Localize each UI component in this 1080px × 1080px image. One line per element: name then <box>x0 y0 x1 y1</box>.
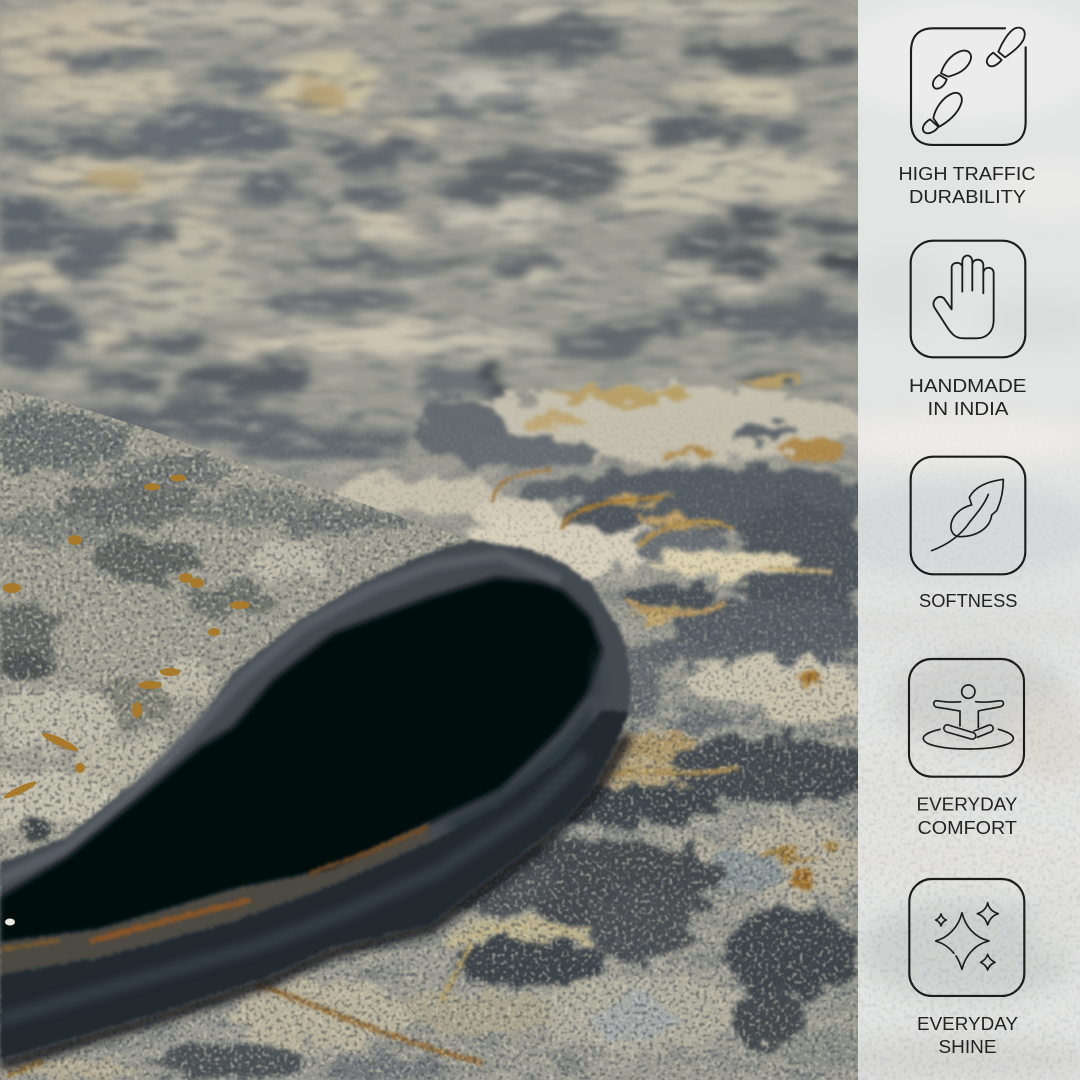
rug binding and outer edge <box>0 540 631 1060</box>
label: high traffic durability: HIGH TRAFFIC <box>898 163 1036 184</box>
label: everyday comfort: EVERYDAY <box>916 794 1018 814</box>
loose thread <box>5 918 15 926</box>
panel: translucent feature sidebar <box>858 0 1080 1080</box>
soft shadow under the roll <box>0 735 628 1065</box>
feature: handmade in india <box>909 241 1026 419</box>
feature: softness <box>911 457 1025 611</box>
dark hollow of the roll <box>0 577 602 943</box>
label: everyday shine <box>917 1013 1018 1057</box>
label: handmade in india: HANDMADE <box>909 375 1026 396</box>
rolled rug corner <box>0 380 631 1065</box>
label: handmade in india: IN INDIA <box>928 398 1009 419</box>
feature: everyday shine <box>909 879 1024 1057</box>
icon: footprints in rounded square <box>911 28 1026 145</box>
lower binding band <box>0 710 628 1060</box>
band highlight <box>0 755 585 1020</box>
feature: high traffic durability <box>898 28 1036 207</box>
label: everyday shine: SHINE <box>938 1036 996 1057</box>
label: everyday comfort: COMFORT <box>918 817 1017 838</box>
underside strip with rust line <box>0 823 430 975</box>
icon: sparkles in rounded square <box>909 879 1024 996</box>
rug top surface <box>0 380 480 870</box>
icon: meditating figure in rounded square <box>909 659 1024 777</box>
label: high traffic durability: DURABILITY <box>909 186 1026 207</box>
label: high traffic durability <box>898 163 1036 207</box>
label: everyday comfort <box>916 794 1018 838</box>
feature: everyday comfort <box>909 659 1024 838</box>
label: everyday shine: EVERYDAY <box>917 1013 1018 1034</box>
underside blue tone <box>440 640 600 835</box>
fuzzy highlight on the binding <box>0 555 560 880</box>
icon: feather in rounded square <box>911 457 1025 574</box>
label: handmade in india <box>909 375 1026 419</box>
icon: hand in rounded square <box>911 241 1025 357</box>
label: softness: SOFTNESS <box>919 590 1018 611</box>
